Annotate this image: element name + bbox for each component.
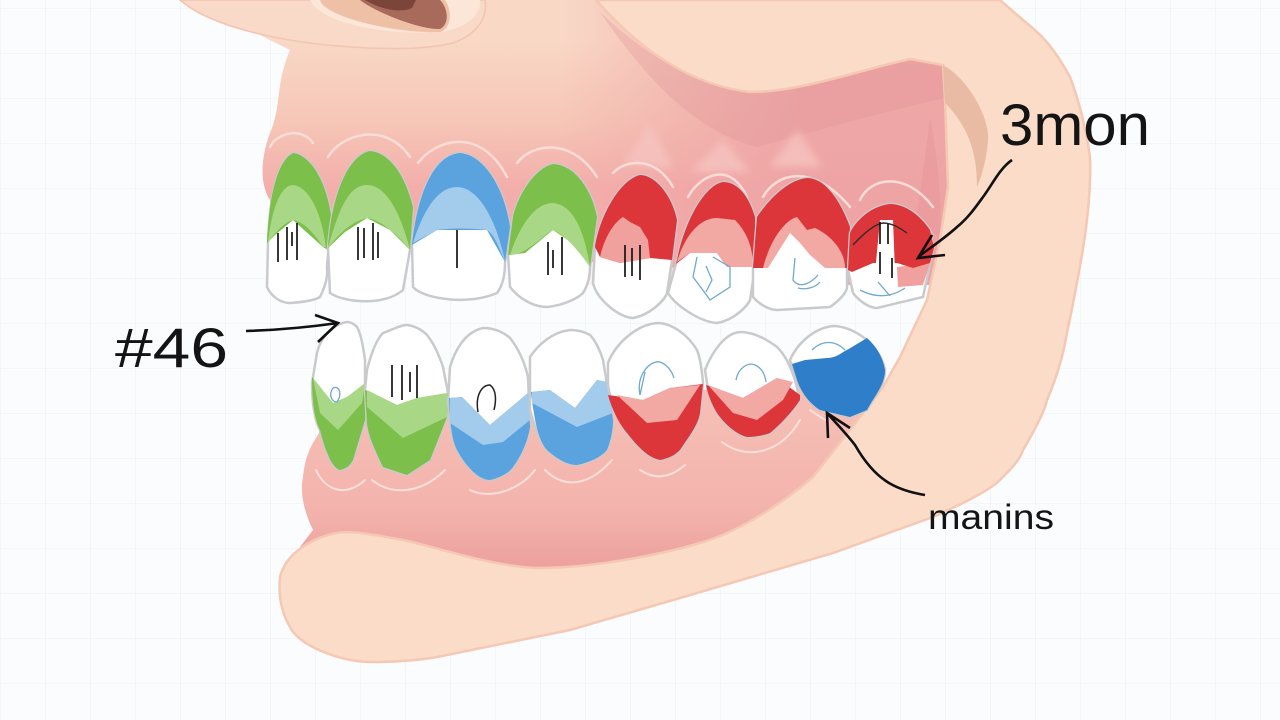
tooth groove marks <box>278 222 892 400</box>
icon: upper tooth 1 green <box>267 153 331 303</box>
icon: upper tooth 5 red <box>593 175 677 318</box>
icon: lower tooth 7 blue <box>790 326 885 417</box>
tooth fissure marks <box>331 257 905 402</box>
icon: lower tooth 2 green <box>365 325 448 475</box>
icon: upper tooth 3 blue <box>412 153 510 300</box>
icon: lower tooth 3 blue <box>448 328 530 480</box>
arrow to lower molar <box>827 413 925 495</box>
icon: lower tooth 5 red <box>608 323 703 460</box>
icon: upper tooth 2 green <box>328 151 413 301</box>
icon: upper tooth 8 red <box>848 204 934 308</box>
callout: #46: #46 <box>115 316 228 379</box>
icon: upper tooth 7 red <box>753 178 850 310</box>
callout: manins: manins <box>928 498 1054 537</box>
panel: lower gum <box>300 380 885 580</box>
callout: 3mon: 3mon <box>1000 93 1150 158</box>
panel: cheek and jaw skin <box>280 0 1090 662</box>
arrow to upper molar <box>918 160 1012 258</box>
callout: 3mon <box>918 93 1150 258</box>
panel: upper teeth <box>267 151 934 323</box>
gum highlights <box>623 123 822 172</box>
icon: lower tooth 6 red <box>705 332 800 437</box>
callout: manins <box>827 413 1054 537</box>
icon: upper tooth 6 red <box>668 182 755 323</box>
panel: upper lip and nose <box>180 0 485 49</box>
callout: #46 <box>115 315 338 379</box>
panel: lower teeth <box>312 322 885 480</box>
icon: lower tooth 1 green <box>312 322 366 470</box>
icon: upper tooth 4 green <box>508 164 597 307</box>
cheek crease <box>943 65 988 187</box>
lower tooth groove <box>477 385 495 412</box>
arrow to lower tooth <box>246 315 338 342</box>
panel: upper gum <box>190 0 948 285</box>
icon: lower tooth 4 blue <box>530 330 613 465</box>
icon: nostril <box>310 0 480 33</box>
